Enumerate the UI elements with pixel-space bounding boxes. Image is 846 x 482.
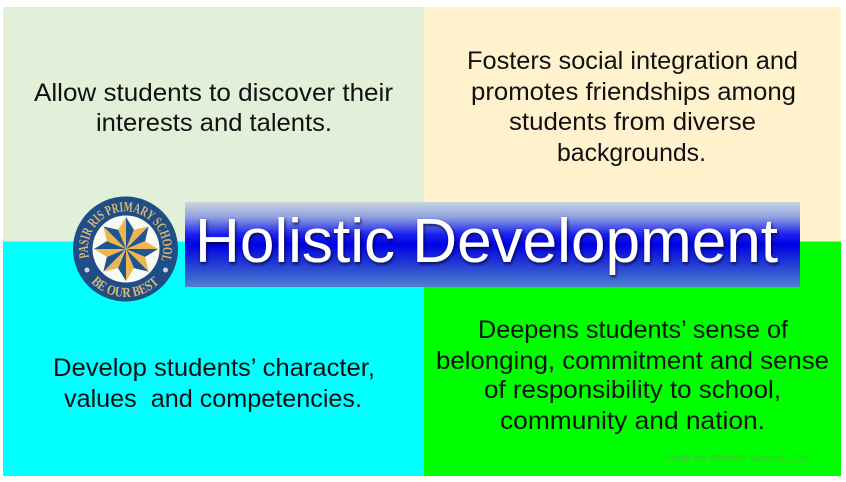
text: character, values and competencies: values and competencies. (64, 385, 362, 413)
text: belonging, commitment and responsibility: belonging, commitment and sense (436, 347, 829, 375)
text: belonging, commitment and responsibility: Deepens students’ sense of (478, 316, 788, 344)
text: social integration and friendships: promotes friendships among (471, 78, 796, 106)
icon: school logo (73, 196, 178, 302)
text: social integration and friendships (467, 47, 798, 167)
banner: Holistic Development (185, 202, 800, 287)
text: social integration and friendships: Fosters social integration and (467, 47, 798, 75)
text: discover interests and talents: Allow students to discover their (34, 79, 393, 107)
logo ring text (78, 202, 172, 298)
text: belonging, commitment and responsibility (436, 316, 829, 435)
text: belonging, commitment and responsibility: community and nation. (500, 407, 765, 435)
logo ring text: BE OUR BEST (91, 276, 158, 298)
title: Holistic Development (195, 207, 778, 276)
text: social integration and friendships: backgrounds. (557, 139, 706, 167)
panel: discover interests (3, 7, 424, 242)
logo ring text: PASIR RIS PRIMARY SCHOOL (78, 202, 172, 261)
text: character, values and competencies (53, 354, 375, 413)
panel: social integration (424, 7, 841, 242)
text: character, values and competencies: Develop students’ character, (53, 354, 375, 382)
panel: sense of belonging (424, 242, 841, 476)
text: discover interests and talents: interests and talents. (96, 109, 332, 137)
text: social integration and friendships: students from diverse (509, 108, 756, 136)
panel: character and values (3, 242, 424, 476)
logo star (94, 217, 158, 281)
text: discover interests and talents (34, 79, 393, 137)
watermark text: PASIR RIS PRIMARY SCHOOL_CCA (667, 454, 809, 463)
text: belonging, commitment and responsibility: of responsibility to school, (484, 376, 781, 404)
